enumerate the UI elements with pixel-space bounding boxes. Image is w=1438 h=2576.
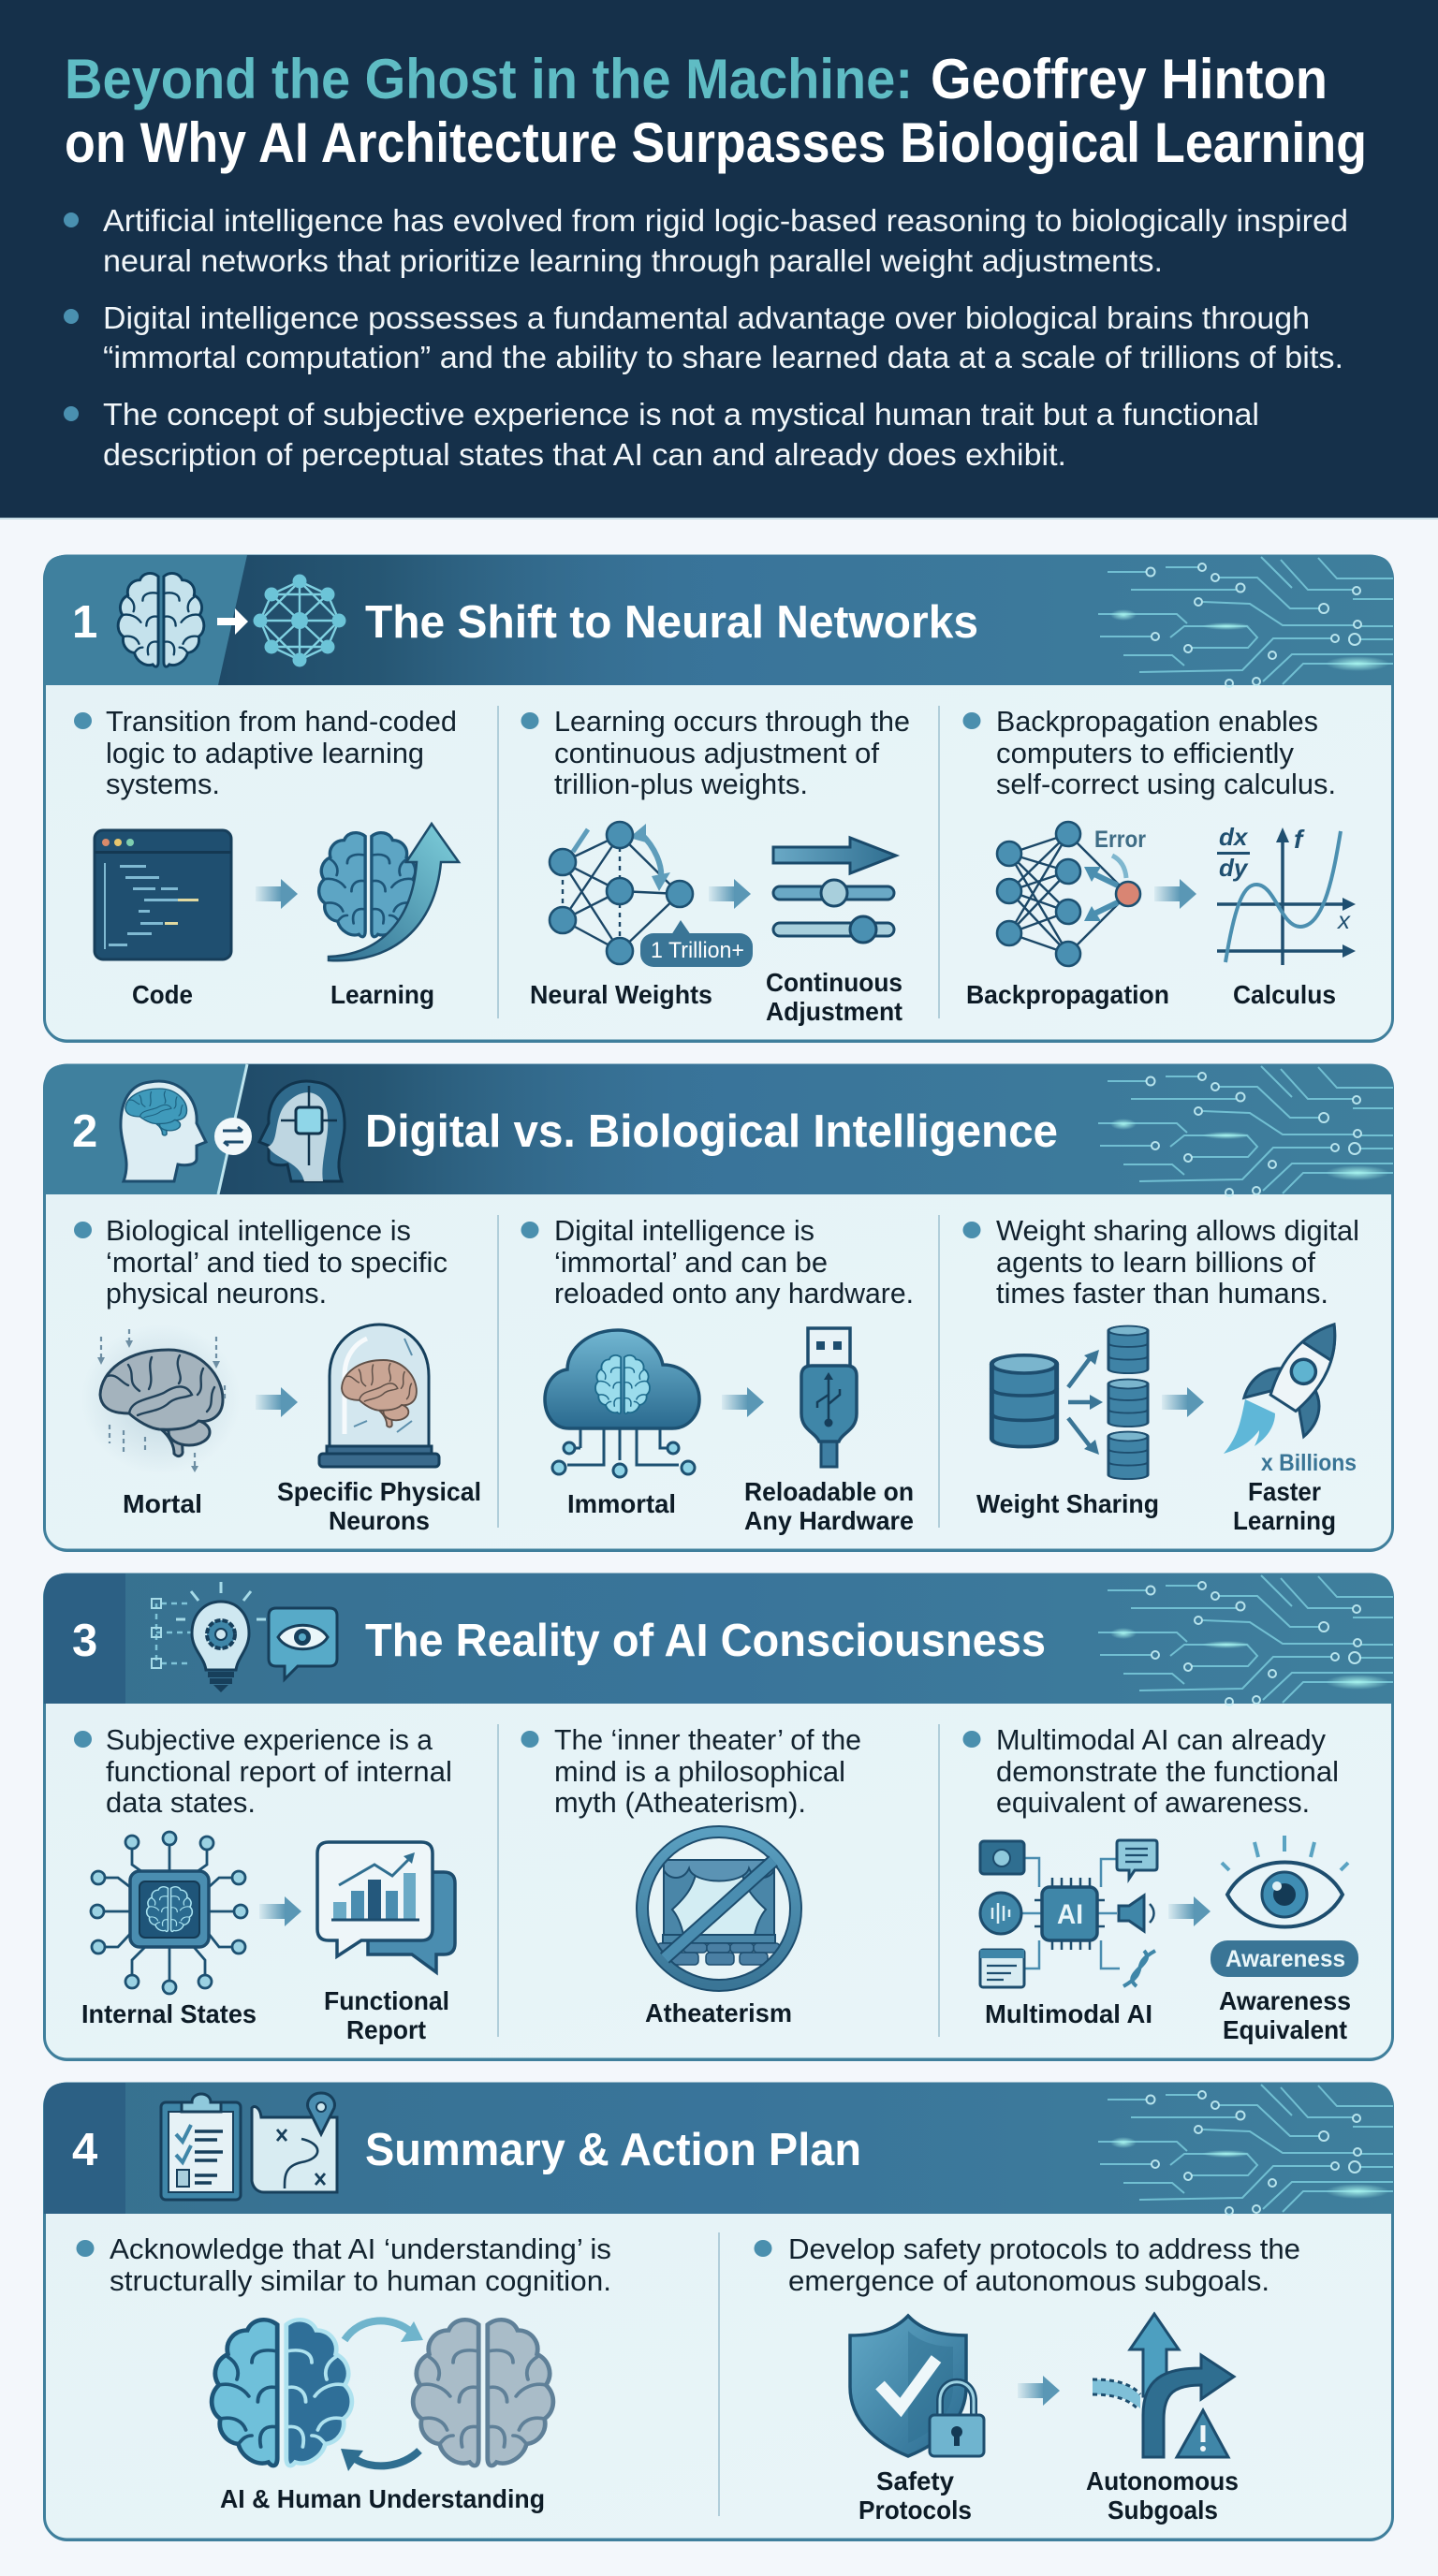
label [277, 1477, 481, 1535]
label [1233, 1477, 1336, 1535]
column 2 text: Digital intelligence is [554, 1214, 814, 1247]
column 3 text: self-correct using calculus. [996, 768, 1336, 800]
panel 4: summary and action plan [44, 2083, 1393, 2541]
section title: Digital vs. Biological Intelligence [365, 1106, 1058, 1157]
label: AI & Human Understanding [220, 2484, 545, 2513]
icon: clipboard and map [161, 2093, 337, 2200]
summary bullets: Digital intelligence possesses a fundamental advantage over biological brains through [103, 300, 1310, 335]
label: Multimodal AI [985, 1999, 1152, 2028]
summary bullets: neural networks that prioritize learning through parallel weight adjustments. [103, 243, 1163, 278]
label [766, 968, 902, 1026]
column 3 text: demonstrate the functional [996, 1755, 1339, 1788]
label: Code [132, 980, 193, 1009]
label: Neural Weights [530, 980, 712, 1009]
column 2 text [521, 1214, 914, 1310]
column 3 text: computers to efficiently [996, 737, 1294, 769]
column 2 text: Develop safety protocols to address the [788, 2232, 1300, 2265]
label [1219, 1986, 1351, 2044]
icon: biological and digital heads [121, 1081, 345, 1181]
arrow [1168, 1896, 1211, 1926]
icon: lightbulb and speech eye [152, 1582, 337, 1692]
arrow [722, 1387, 764, 1417]
arrow [1018, 2376, 1060, 2406]
column 1 text: functional report of internal [106, 1755, 452, 1788]
label: Immortal [567, 1489, 676, 1518]
label: Specific Physical [277, 1477, 481, 1506]
column 3 text: equivalent of awareness. [996, 1786, 1310, 1819]
icon: multimodal AI chip [980, 1840, 1157, 1987]
summary bullets: “immortal computation” and the ability to share learned data at a scale of trillions of bits. [103, 340, 1343, 374]
label: Equivalent [1223, 2015, 1347, 2044]
awareness pill [1211, 1940, 1358, 1977]
label: Subgoals [1108, 2496, 1218, 2525]
icon: neural weights [550, 822, 753, 967]
column 2 text: reloaded onto any hardware. [554, 1277, 914, 1310]
header banner [0, 0, 1438, 520]
arrow [256, 1387, 298, 1417]
column 2 text: ‘immortal’ and can be [554, 1246, 828, 1279]
column 3 text [962, 1214, 1359, 1310]
arrow [1154, 879, 1196, 909]
label: Autonomous [1086, 2466, 1239, 2496]
arrow [709, 879, 751, 909]
column 2 text [755, 2232, 1300, 2297]
column 3 text: times faster than humans. [996, 1277, 1328, 1310]
column 1 text: systems. [106, 768, 220, 800]
icon: weight sharing databases [991, 1326, 1148, 1479]
icon: usb connector [801, 1328, 857, 1467]
icon: calculus graph: f [1294, 825, 1305, 854]
section title: Summary & Action Plan [365, 2125, 861, 2175]
label [324, 1986, 449, 2044]
column 1 text: Subjective experience is a [106, 1723, 433, 1756]
icon: calculus graph: dy [1219, 854, 1249, 882]
icon: awareness eye [1222, 1836, 1348, 1926]
column 2 text: myth (Atheaterism). [554, 1786, 806, 1819]
label [858, 2466, 972, 2525]
column 3 text: agents to learn billions of [996, 1246, 1315, 1279]
icon: backpropagation network: Error [1094, 827, 1146, 853]
icon: diverging arrows and warning [1093, 2314, 1234, 2457]
summary bullets: description of perceptual states that AI can and already does exhibit. [103, 437, 1066, 472]
icon: brain in glass jar [319, 1325, 439, 1467]
label: Learning [1233, 1506, 1336, 1535]
column 1 text: ‘mortal’ and tied to specific [106, 1246, 448, 1279]
column 2 text: trillion-plus weights. [554, 768, 808, 800]
column 1 text [74, 705, 457, 800]
icon: AI and human brains [212, 2320, 553, 2471]
icon: multimodal AI chip: AI [1057, 1899, 1083, 1930]
label: Faster [1248, 1477, 1321, 1506]
icon: sliders [773, 838, 896, 943]
column 3 text [962, 1723, 1339, 1819]
column 3 text: Weight sharing allows digital [996, 1214, 1359, 1247]
label: Continuous [766, 968, 902, 997]
summary bullets [64, 203, 1348, 472]
section number: 1 [72, 597, 97, 648]
column 1 text: structurally similar to human cognition. [110, 2264, 611, 2297]
label: Functional [324, 1986, 449, 2015]
section number: 4 [72, 2125, 97, 2175]
icon: rocket [1224, 1304, 1366, 1476]
label [1086, 2466, 1239, 2525]
icon: chip internal states [91, 1832, 247, 1994]
panel 1: the shift to neural networks [44, 555, 1393, 1043]
column 2 text [521, 1723, 861, 1819]
awareness pill: Awareness [1225, 1946, 1345, 1972]
icon: code window [95, 830, 231, 959]
label: Any Hardware [744, 1506, 914, 1535]
label: Atheaterism [645, 1998, 792, 2027]
icon: prohibited theater [642, 1832, 796, 1985]
label: Protocols [858, 2496, 972, 2525]
label: Internal States [81, 1999, 257, 2028]
column 3 text: Backpropagation enables [996, 705, 1318, 738]
icon: functional report speech bubbles [317, 1842, 455, 1972]
title [65, 48, 1367, 174]
column 2 text [521, 705, 910, 800]
label: Mortal [123, 1489, 202, 1518]
column 3 text: Multimodal AI can already [996, 1723, 1326, 1756]
column 1 text: data states. [106, 1786, 256, 1819]
column 1 text: logic to adaptive learning [106, 737, 424, 769]
label [744, 1477, 914, 1535]
label: Weight Sharing [976, 1489, 1159, 1518]
column 1 text: Acknowledge that AI ‘understanding’ is [110, 2232, 611, 2265]
column 2 text: mind is a philosophical [554, 1755, 845, 1788]
column 2 text: The ‘inner theater’ of the [554, 1723, 861, 1756]
icon: shield and lock [850, 2316, 984, 2456]
title: Beyond the Ghost in the Machine: [65, 48, 913, 110]
column 2 text: Learning occurs through the [554, 705, 910, 738]
label: Report [346, 2015, 426, 2044]
column 1 text: Transition from hand-coded [106, 705, 457, 738]
arrow [259, 1896, 301, 1926]
column 3 text [962, 705, 1336, 800]
column 2 text: emergence of autonomous subgoals. [788, 2264, 1269, 2297]
section title: The Reality of AI Consciousness [365, 1616, 1046, 1666]
title: Geoffrey Hinton [931, 48, 1328, 110]
icon: rocket: x Billions [1261, 1450, 1357, 1476]
section number: 2 [72, 1106, 97, 1157]
column 1 text [74, 1214, 448, 1310]
label: Neurons [329, 1506, 430, 1535]
label: Reloadable on [744, 1477, 914, 1506]
icon: grey mortal brain [81, 1325, 241, 1474]
label: Learning [330, 980, 434, 1009]
section number: 3 [72, 1616, 97, 1666]
column 1 text: physical neurons. [106, 1277, 327, 1310]
icon: calculus graph: x [1336, 906, 1351, 934]
icon: calculus graph [1217, 823, 1356, 965]
icon: neural weights: 1 Trillion+ [651, 938, 744, 963]
column 1 text [77, 2232, 611, 2297]
arrow [256, 879, 298, 909]
summary bullets: Artificial intelligence has evolved from rigid logic-based reasoning to biologically inspired [103, 203, 1348, 238]
label: Adjustment [766, 997, 902, 1026]
column 1 text: Biological intelligence is [106, 1214, 411, 1247]
icon: cloud brain [545, 1330, 699, 1477]
label: Safety [876, 2466, 954, 2496]
icon: backpropagation network [997, 822, 1146, 966]
column 1 text [74, 1723, 452, 1819]
summary bullets: The concept of subjective experience is not a mystical human trait but a functional [103, 397, 1259, 432]
icon: brain to network [118, 573, 345, 666]
label: Backpropagation [966, 980, 1169, 1009]
panel 3: the reality of AI consciousness [44, 1573, 1393, 2061]
section title: The Shift to Neural Networks [365, 597, 978, 648]
panel 2: digital vs biological intelligence [44, 1064, 1393, 1552]
arrow [1162, 1387, 1204, 1417]
label: Calculus [1233, 980, 1336, 1009]
column 2 text: continuous adjustment of [554, 737, 879, 769]
icon: learning brain with arrow [319, 824, 459, 960]
label: Awareness [1219, 1986, 1351, 2015]
icon: calculus graph: dx [1219, 823, 1249, 851]
